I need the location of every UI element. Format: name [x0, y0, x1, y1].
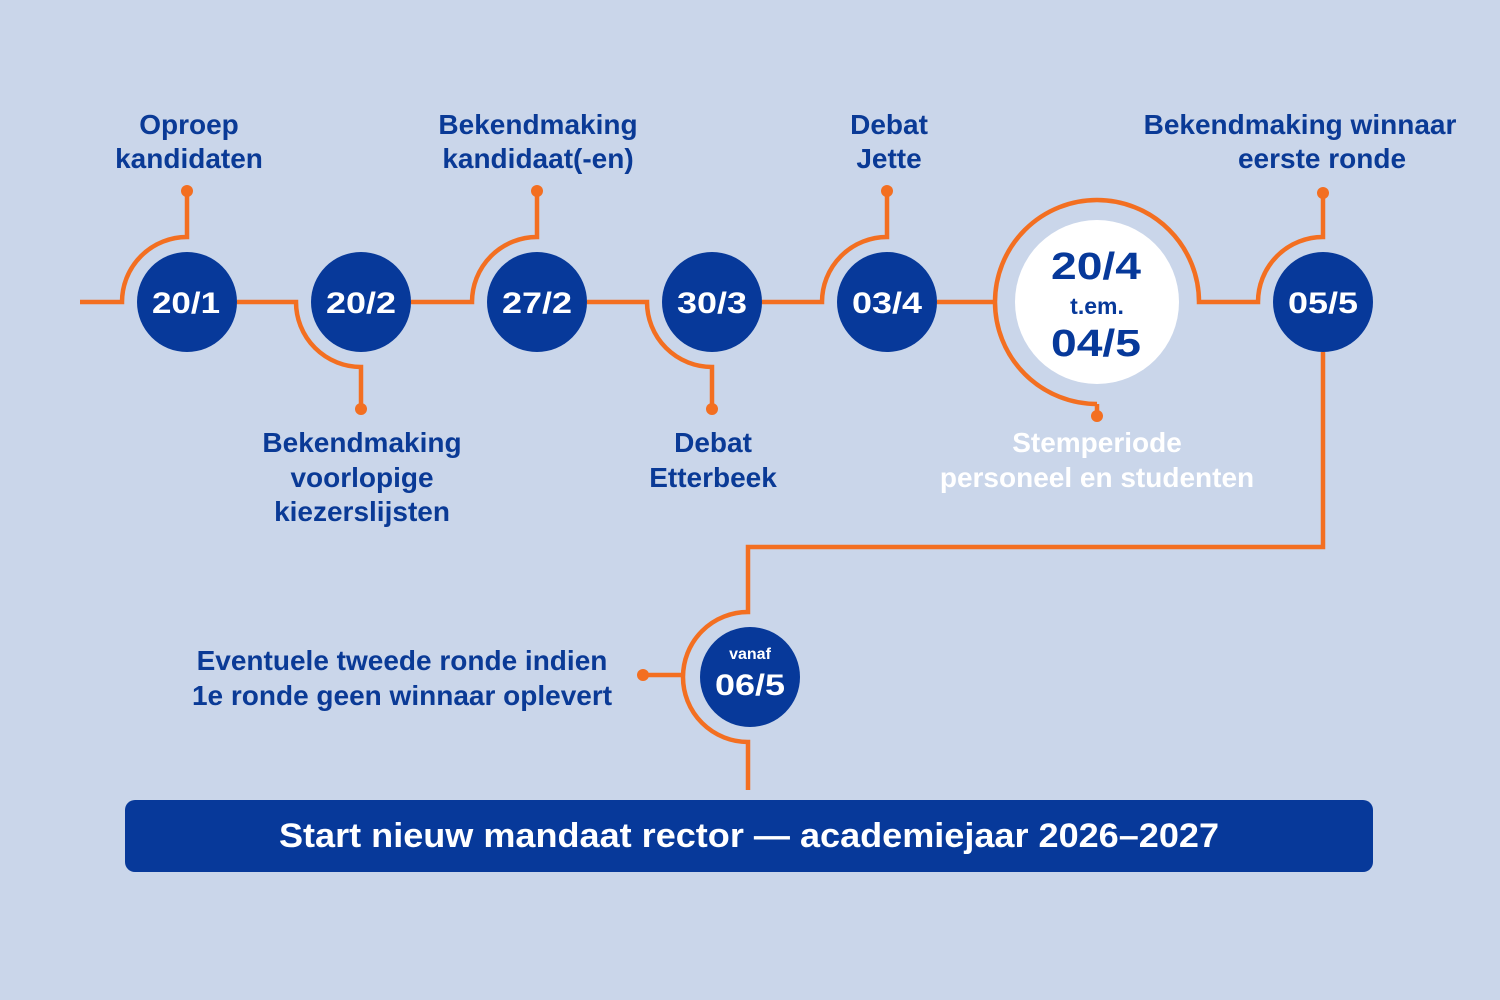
date labels — [152, 287, 1358, 702]
date circles — [137, 220, 1373, 727]
event labels: Eventuele tweede ronde indien — [197, 645, 607, 676]
event labels: Jette — [856, 143, 922, 174]
date labels: 27/2 — [502, 287, 572, 320]
event labels: Bekendmaking winnaar — [1144, 109, 1456, 140]
date labels: 03/4 — [852, 287, 922, 320]
event labels: Etterbeek — [649, 462, 777, 493]
event labels: voorlopige — [290, 462, 434, 493]
event labels: Debat — [674, 427, 752, 458]
dots — [181, 185, 1329, 681]
stemperiode label — [940, 427, 1254, 493]
event labels: kiezerslijsten — [274, 496, 450, 527]
stemperiode label: Stemperiode — [1012, 427, 1182, 458]
event labels: kandidaat(-en) — [442, 143, 634, 174]
date labels: 30/3 — [677, 287, 747, 320]
event labels: kandidaten — [115, 143, 263, 174]
event labels: Oproep — [139, 109, 239, 140]
date labels: 20/1 — [152, 287, 220, 320]
event labels: eerste ronde — [1238, 143, 1406, 174]
date labels: vanaf — [729, 646, 772, 663]
stemperiode label: personeel en studenten — [940, 462, 1254, 493]
timeline line — [80, 193, 1323, 790]
date labels: 20/2 — [326, 287, 396, 320]
event labels: Bekendmaking — [262, 427, 462, 458]
date labels: 05/5 — [1288, 287, 1358, 320]
stemperiode dates: t.em. — [1070, 293, 1124, 319]
date labels: 06/5 — [715, 669, 785, 702]
stemperiode dates: 20/4 — [1051, 246, 1141, 288]
event labels: 1e ronde geen winnaar oplevert — [192, 680, 612, 711]
banner — [125, 800, 1373, 872]
event labels — [115, 109, 1456, 711]
stemperiode dates: 04/5 — [1051, 323, 1141, 365]
event labels: Bekendmaking — [438, 109, 638, 140]
event labels: Debat — [850, 109, 928, 140]
stemperiode dates — [1051, 246, 1141, 365]
banner: Start nieuw mandaat rector — academiejaar 2026–2027 — [279, 817, 1219, 855]
